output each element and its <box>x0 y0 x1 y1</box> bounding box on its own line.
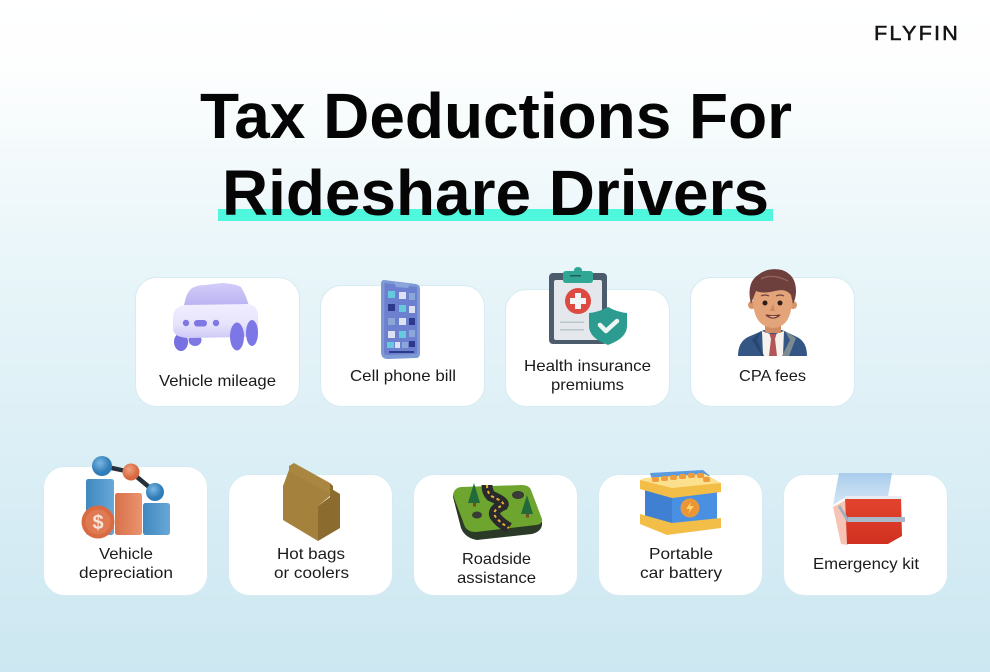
label: premiums <box>551 377 624 394</box>
label: Roadside <box>462 551 531 568</box>
title underline <box>218 209 773 221</box>
title <box>200 80 792 229</box>
panel: hot bags or coolers <box>228 463 392 596</box>
title line 2: Rideshare Drivers <box>222 157 769 229</box>
label: Vehicle <box>99 546 153 563</box>
label <box>524 358 651 394</box>
label: Health insurance <box>524 358 651 375</box>
label: Cell phone bill <box>350 368 456 385</box>
icon: kit box <box>833 473 905 545</box>
title line 1: Tax Deductions For <box>200 80 792 152</box>
panel: vehicle depreciation <box>44 456 208 596</box>
icon: depreciation chart <box>82 456 170 538</box>
panel: vehicle mileage <box>136 278 300 406</box>
label: Hot bags <box>277 546 345 563</box>
label: CPA fees <box>739 368 806 385</box>
icon: accountant <box>738 269 807 356</box>
icon: paper bag <box>283 463 340 541</box>
logo: FLYFIN <box>874 22 960 45</box>
icon: road <box>453 483 542 540</box>
icon: battery <box>640 470 721 535</box>
panel: health insurance premiums <box>506 267 670 406</box>
icon: clipboard with shield <box>549 267 627 345</box>
label: depreciation <box>79 565 173 582</box>
panel: CPA fees <box>690 269 854 406</box>
label: or coolers <box>274 565 349 582</box>
panel: roadside assistance <box>414 474 578 596</box>
label <box>79 546 173 582</box>
label: Emergency kit <box>813 556 920 573</box>
label <box>457 551 536 587</box>
panel: cell phone bill <box>320 280 484 406</box>
icon: depreciation chart: $ <box>92 512 104 534</box>
label: assistance <box>457 570 536 587</box>
icon: car <box>173 283 258 351</box>
label: Vehicle mileage <box>159 373 276 390</box>
icon: phone <box>381 280 420 359</box>
label <box>274 546 349 582</box>
label: Portable <box>649 546 713 563</box>
label <box>640 546 722 582</box>
panel: portable car battery <box>598 470 762 596</box>
label: car battery <box>640 565 722 582</box>
panel: emergency kit <box>784 473 948 596</box>
